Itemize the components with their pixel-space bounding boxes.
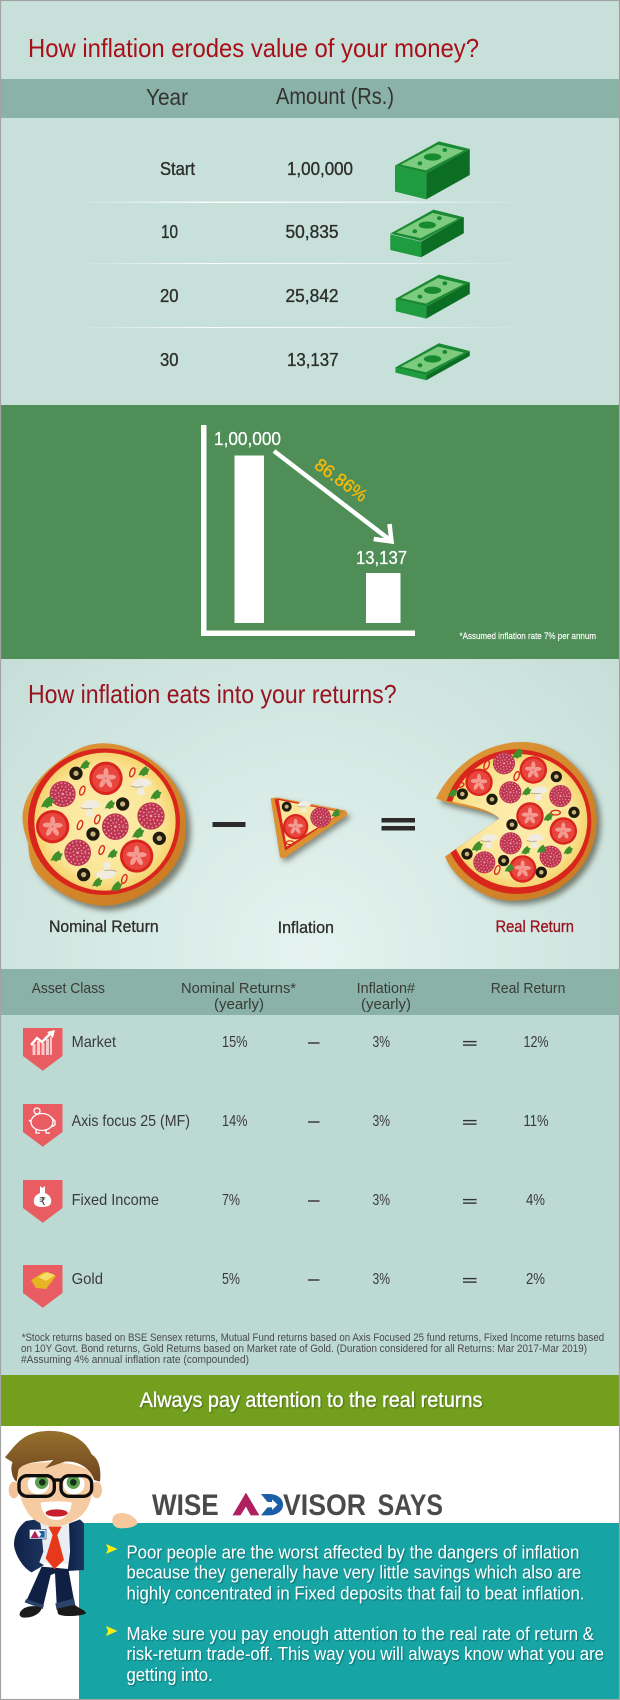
- icon: piggy bank shield: [23, 1104, 62, 1147]
- panel: wise advisor: [79, 1489, 620, 1700]
- row: start: [160, 141, 470, 199]
- icon: money stack: [390, 210, 464, 257]
- label: nominal return: Nominal Return: [49, 917, 159, 936]
- text: first tip: Poor people are the worst affected by the dangers of inflation: [126, 1542, 579, 1562]
- row: axis focus 25: 14%: [222, 1113, 248, 1130]
- row: axis focus 25: Axis focus 25 (MF): [72, 1113, 190, 1130]
- row: fixed income: Fixed Income: [72, 1192, 159, 1209]
- title: erodes value: How inflation erodes value of your money?: [28, 33, 479, 63]
- icon: AD logo: [232, 1493, 283, 1515]
- row: fixed income: [23, 1180, 545, 1223]
- table header band: [0, 79, 620, 118]
- row: gold: [23, 1265, 545, 1308]
- label: real return: Real Return: [496, 917, 574, 936]
- row: market: 3%: [372, 1034, 390, 1051]
- row: start: 1,00,000: [287, 159, 353, 179]
- table header band: Real Return: [491, 981, 565, 997]
- table header band: Nominal Returns*: [181, 981, 296, 997]
- text: first tip: because they generally have very little savings which also are: [126, 1562, 581, 1582]
- table header band: (yearly): [214, 997, 264, 1013]
- row: market: [23, 1028, 548, 1071]
- icon: pizza slice: [271, 797, 350, 862]
- table header band: Amount (Rs.): [276, 83, 394, 109]
- text: second tip: getting into.: [126, 1664, 213, 1685]
- row: 10: 50,835: [286, 222, 338, 242]
- panel: inflation erodes value table: [0, 0, 620, 405]
- icon: money bag shield: ₹: [39, 1195, 46, 1208]
- banner: real returns: [0, 1375, 620, 1426]
- heading: wise advisor says: WISE: [152, 1489, 219, 1522]
- row: axis focus 25: 11%: [524, 1113, 548, 1130]
- text: first tip: [126, 1542, 584, 1604]
- row: gold: 3%: [372, 1271, 390, 1288]
- footnote: return sources: #Assuming 4% annual inflation rate (compounded): [21, 1354, 249, 1366]
- icon: minus sign: [212, 822, 246, 827]
- icon: small money stack: [395, 343, 470, 380]
- icon: advisor cartoon: [5, 1431, 138, 1618]
- row: axis focus 25: 3%: [372, 1113, 390, 1130]
- footnote: return sources: [21, 1332, 604, 1366]
- heading: wise advisor says: VISOR: [283, 1489, 366, 1522]
- icon: market chart shield: [23, 1028, 62, 1071]
- table header band: [0, 969, 620, 1015]
- icon: pizza missing slice: [436, 742, 601, 905]
- row: 30: [160, 343, 470, 380]
- row: 20: 20: [160, 286, 178, 306]
- banner: real returns: Always pay attention to the real returns: [140, 1389, 482, 1412]
- row: gold: 2%: [526, 1271, 545, 1288]
- row: start: Start: [160, 159, 195, 179]
- title: eats returns: How inflation eats into your returns?: [28, 679, 397, 709]
- table header band: (yearly): [361, 997, 411, 1013]
- row: market: 15%: [222, 1034, 248, 1051]
- icon: whole pizza: [23, 743, 191, 910]
- panel: asset class table: [0, 969, 620, 1375]
- row: market: 12%: [524, 1034, 548, 1051]
- row: 20: [160, 275, 470, 319]
- row: gold: 5%: [222, 1271, 240, 1288]
- heading: wise advisor says: [152, 1489, 443, 1522]
- icon: money stack: [395, 275, 470, 319]
- text: first tip: highly concentrated in Fixed deposits that fail to beat inflation.: [126, 1582, 584, 1604]
- panel: green chart: [0, 405, 620, 659]
- label: start value: 1,00,000: [214, 429, 281, 449]
- row: axis focus 25: [23, 1104, 548, 1147]
- text: second tip: [126, 1623, 604, 1685]
- panel: pizza comparison: [0, 659, 620, 969]
- icon: money bag shield: [23, 1180, 62, 1223]
- row: fixed income: 4%: [526, 1192, 545, 1209]
- row: market: Market: [72, 1034, 116, 1051]
- icon: gold bars shield: [23, 1265, 62, 1308]
- row: fixed income: 3%: [372, 1192, 390, 1209]
- row: 10: 10: [161, 222, 178, 242]
- bullet: first arrow: [106, 1544, 118, 1554]
- label: percent decline: 86.86%: [311, 454, 371, 506]
- row: 10: [161, 210, 464, 257]
- table header band: Inflation#: [357, 981, 415, 997]
- table header band: Year: [146, 84, 188, 110]
- row: 30: 30: [160, 350, 178, 370]
- bar chart: axes and bars: [201, 425, 415, 636]
- arrow: decline: [274, 451, 392, 542]
- label: end value: 13,137: [356, 548, 407, 568]
- row: gold: Gold: [72, 1271, 103, 1288]
- footnote: assumed inflation: *Assumed inflation rate 7% per annum: [460, 631, 596, 641]
- bullet: second arrow: [106, 1626, 118, 1636]
- icon: large money stack: [395, 141, 470, 199]
- row: 20: 25,842: [286, 286, 338, 306]
- row: fixed income: 7%: [222, 1192, 240, 1209]
- row: 30: 13,137: [287, 350, 338, 370]
- heading: wise advisor says: SAYS: [378, 1489, 443, 1522]
- table header band: Asset Class: [32, 981, 105, 997]
- label: inflation: Inflation: [278, 918, 334, 937]
- icon: equals sign: [382, 818, 415, 830]
